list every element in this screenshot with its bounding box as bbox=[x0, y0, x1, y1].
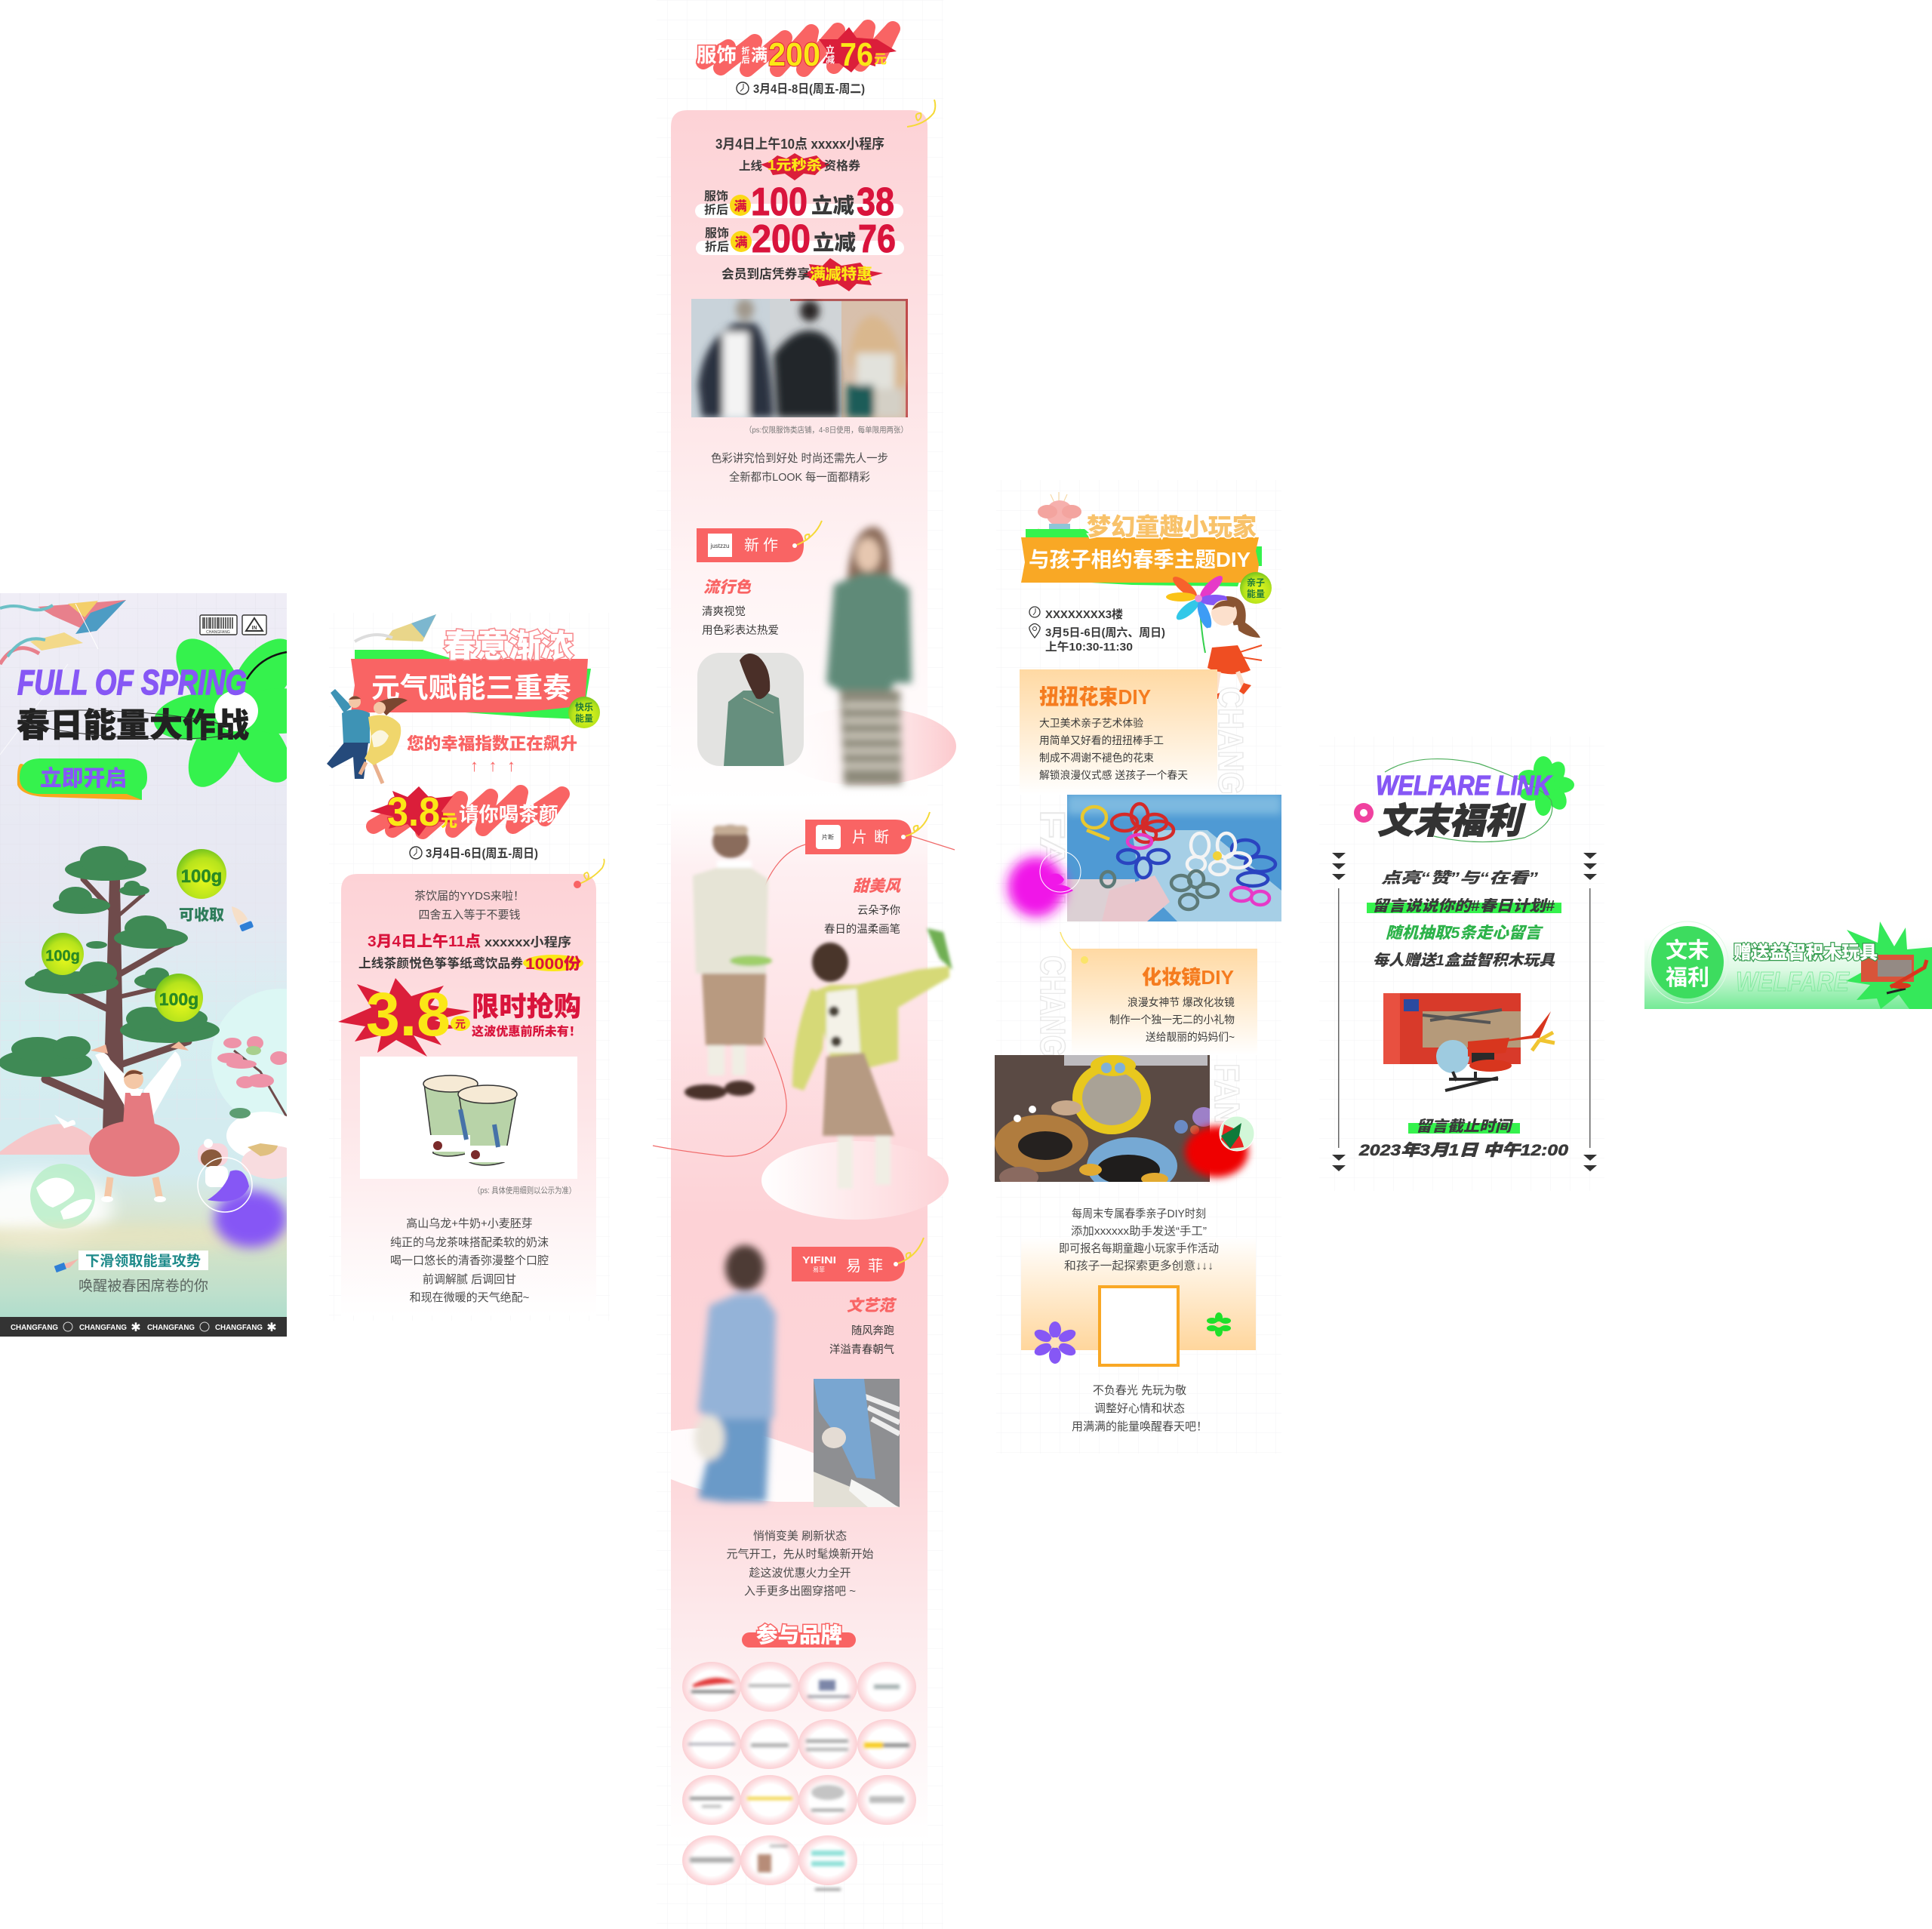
heading: fashion discount: 折 bbox=[741, 45, 750, 56]
background grid: DIY column bbox=[996, 480, 1281, 1454]
burst bbox=[1846, 921, 1932, 1009]
intro text: 茶饮届的YYDS来啦！ bbox=[414, 890, 525, 903]
offer row 100: 100 bbox=[751, 180, 808, 224]
watermarks: FAN bbox=[1033, 810, 1072, 906]
recycle badge: IN bbox=[252, 626, 257, 631]
rule line 4: 每人赠送1盒益智积木玩具 bbox=[1373, 952, 1555, 969]
illustration: girl bbox=[1205, 596, 1262, 699]
slogan: 您的幸福指数正在飙升 bbox=[407, 734, 577, 753]
date: 3月4日-8日(周五-周二) bbox=[753, 83, 865, 96]
panel: fashion bbox=[653, 27, 956, 1891]
description: 洋溢青春朝气 bbox=[829, 1343, 894, 1356]
banner: 与孩子相约春季主题DIY bbox=[1029, 548, 1251, 571]
label: collectable: 可收取 bbox=[179, 906, 224, 924]
bubble: 100g bbox=[177, 849, 226, 899]
brand logos grid bbox=[682, 1662, 916, 1891]
blurred purple blob bbox=[214, 1190, 287, 1248]
paragraph: 喝一口悠长的清香弥漫整个口腔 bbox=[390, 1254, 549, 1267]
footer bar: CHANGFANG bbox=[215, 1323, 263, 1332]
bubble: 100g middle: 100g bbox=[159, 989, 198, 1009]
panel: welfare banner bbox=[1644, 921, 1932, 1009]
banner: 元气赋能三重奏 bbox=[371, 672, 571, 703]
offer row 200: 满 bbox=[735, 235, 747, 250]
tag: brand 新作 bbox=[697, 521, 822, 562]
heading: 3.8 tea bbox=[370, 786, 562, 836]
heading: popular color: 流行色 bbox=[703, 578, 752, 596]
paragraph: 和现在微暖的天气绝配~ bbox=[410, 1291, 530, 1304]
tag: brand 新作: 新 作 bbox=[744, 537, 778, 554]
price burst bbox=[338, 978, 471, 1057]
footnote: （ps: 具体使用细则以公示为准） bbox=[473, 1185, 576, 1195]
icon: pointing hand bbox=[232, 906, 254, 932]
photo: twist-stick bouquet bbox=[1067, 795, 1281, 921]
offer row 100: 服饰 bbox=[704, 189, 728, 203]
icon: kite bbox=[0, 600, 126, 755]
button: start: 立即开启 bbox=[40, 765, 127, 791]
outline text WELFARE: WELFARE bbox=[1736, 966, 1850, 997]
description: 大卫美术亲子艺术体验 bbox=[1039, 717, 1143, 729]
description bbox=[1109, 996, 1235, 1043]
rule line 1: 点亮“赞”与“在看” bbox=[1381, 869, 1538, 887]
panel: spring poster bbox=[0, 593, 287, 1337]
description: 用色彩表达热爱 bbox=[702, 624, 779, 637]
description: 解锁浪漫仪式感 送孩子一个春天 bbox=[1039, 769, 1188, 781]
english title: FULL OF SPRING bbox=[17, 663, 247, 702]
image: toy helicopter bbox=[1383, 993, 1555, 1091]
paragraph: 纯正的乌龙茶味搭配柔软的奶沫 bbox=[390, 1236, 549, 1249]
offer row 100 bbox=[695, 180, 903, 224]
circle badge: 福利 bbox=[1666, 965, 1709, 990]
photo: jeans and shoes bbox=[814, 1379, 900, 1507]
intro text 2: 四舍五入等于不要钱 bbox=[418, 908, 521, 921]
footnote: （ps:仅限服饰类店铺，4-8日使用，每单限用两张） bbox=[745, 425, 908, 435]
card: mirror bbox=[1072, 949, 1257, 1055]
watermarks: CHANG bbox=[1211, 687, 1251, 795]
card: twist flowers bbox=[1020, 669, 1217, 795]
photo: fashion models (blurred) bbox=[691, 299, 908, 417]
watermarks bbox=[1033, 687, 1251, 1124]
icon: green flower bbox=[1518, 756, 1574, 816]
flash sale heading: 限时抢购 bbox=[472, 991, 581, 1022]
background grid: tea column bbox=[329, 613, 610, 1321]
price burst: 元 bbox=[455, 1018, 466, 1030]
coupon line: 资格券 bbox=[824, 158, 860, 173]
watermarks: FAN bbox=[1208, 1063, 1247, 1124]
footer bar: CHANGFANG bbox=[11, 1323, 58, 1332]
closing text: 调整好心情和状态 bbox=[1094, 1402, 1185, 1415]
offer card bbox=[338, 859, 605, 1315]
tag: brand 新作: justzzu bbox=[710, 543, 729, 549]
illustration: pine tree bbox=[0, 846, 220, 1132]
icon: pinwheel bbox=[1166, 573, 1230, 653]
card: sign-up bbox=[1021, 1208, 1256, 1365]
description: 送给靓丽的妈妈们~ bbox=[1146, 1031, 1235, 1043]
offer row 200: 服饰 bbox=[705, 226, 729, 240]
heading: fashion discount: 76 bbox=[840, 36, 873, 73]
deadline date: 2023年3月1日 中午12:00 bbox=[1358, 1141, 1568, 1159]
description: 用简单又好看的扭扭棒手工 bbox=[1039, 734, 1164, 746]
red blurred blob bbox=[1185, 1116, 1254, 1177]
barcode tag: CHANGFANG bbox=[206, 630, 230, 635]
badge: happy energy bbox=[568, 697, 600, 728]
badge: happy energy: 快乐 bbox=[575, 701, 593, 712]
description bbox=[829, 1324, 894, 1356]
closing paragraph bbox=[726, 1530, 874, 1598]
closing text: 不负春光 先玩为敬 bbox=[1093, 1384, 1186, 1397]
icon: crown mascot bbox=[1038, 492, 1081, 537]
time line: 3月4日上午11点 bbox=[368, 932, 481, 950]
decorative orbit bbox=[20, 652, 287, 744]
panel: tea offer bbox=[327, 614, 605, 1315]
closing text: 用满满的能量唤醒春天吧！ bbox=[1072, 1420, 1208, 1433]
circle badge: 文末 bbox=[1666, 938, 1709, 963]
heading: 3.8 tea: 元 bbox=[441, 811, 457, 830]
description bbox=[824, 904, 900, 936]
rule line 2: 留言说说你的#春日计划# bbox=[1372, 897, 1555, 915]
heading: 扭扭花束DIY bbox=[1039, 685, 1151, 709]
heading outline: 梦幻童趣小玩家 bbox=[1087, 513, 1257, 540]
title: 文末福利 bbox=[1377, 801, 1526, 841]
photo: blue denim model (blurred) bbox=[694, 1245, 776, 1502]
offer row 200: 76 bbox=[858, 217, 896, 261]
sign-up text bbox=[1059, 1208, 1219, 1272]
offer row 200: 立减 bbox=[813, 230, 856, 254]
coupon line: 上线 bbox=[739, 158, 762, 173]
image: toy bbox=[1861, 955, 1927, 993]
heading: 3.8 tea: 3.8 bbox=[387, 789, 440, 835]
headline: 赠送益智积木玩具 bbox=[1734, 942, 1878, 963]
recycle badge bbox=[242, 615, 266, 635]
offer row 100: 38 bbox=[857, 180, 894, 224]
bubble: 100g: 100g bbox=[181, 866, 222, 887]
photo: green jacket model (blurred) bbox=[826, 527, 912, 785]
english title: WELFARE LINK bbox=[1376, 770, 1553, 801]
arrows up: ↑↑↑ bbox=[470, 756, 515, 775]
ellipse: floor for yellow look bbox=[761, 1141, 949, 1220]
sign-up text: 每周末专属春季亲子DIY时刻 bbox=[1072, 1208, 1206, 1220]
product image bbox=[360, 1057, 577, 1179]
photo: yellow jacket model bbox=[792, 928, 952, 1189]
photo: back view jacket bbox=[697, 653, 804, 766]
footer bar: ✱ bbox=[266, 1321, 277, 1334]
bubble: 100g left bbox=[42, 933, 84, 975]
closing paragraph: 入手更多出圈穿搭吧 ~ bbox=[744, 1585, 856, 1598]
circle badge bbox=[1647, 921, 1728, 1003]
time: 上午10:30-11:30 bbox=[1045, 640, 1133, 654]
heading: fashion discount: 后 bbox=[741, 54, 750, 65]
footer bar: ✱ bbox=[131, 1321, 141, 1334]
background grid: clothing column bbox=[657, 0, 943, 1929]
side rules bbox=[1332, 853, 1597, 1171]
paragraph: 前调解腻 后调回甘 bbox=[423, 1273, 516, 1286]
footer bar bbox=[0, 1317, 287, 1337]
icon: tag string bbox=[1060, 932, 1085, 960]
tag: brand 易菲 bbox=[792, 1238, 924, 1281]
tag: brand 易菲: 易菲 bbox=[813, 1266, 825, 1273]
closing paragraph: 悄悄变美 刷新状态 bbox=[753, 1530, 847, 1543]
bubble: 100g left: 100g bbox=[45, 948, 80, 964]
illustration: dancing couple bbox=[327, 689, 408, 783]
heading: fashion discount bbox=[697, 27, 897, 73]
icon: tag string bbox=[907, 100, 935, 127]
heading: 3.8 tea: 请你喝茶颜 bbox=[459, 803, 558, 826]
illustration: branch blossoms bbox=[217, 1036, 288, 1117]
photo: clay mirrors bbox=[995, 1055, 1210, 1182]
intro text 2: 全新都市LOOK 每一面都精彩 bbox=[729, 470, 870, 484]
date: 3月5日-6日(周六、周日) bbox=[1045, 626, 1165, 639]
closing paragraph: 趁这波优惠火力全开 bbox=[749, 1566, 851, 1580]
barcode tag bbox=[200, 615, 237, 635]
icon: tea cups bbox=[423, 1075, 517, 1165]
sign-up text: 即可报名每期童趣小玩家手作活动 bbox=[1059, 1241, 1219, 1255]
offer line: 上线茶颜悦色筝筝纸鸢饮品券 bbox=[358, 955, 524, 971]
heading: literary style: 文艺范 bbox=[847, 1297, 897, 1315]
icon: pink flower bbox=[1354, 803, 1374, 823]
white wave bbox=[671, 1428, 823, 1502]
bubble: 100g middle bbox=[155, 974, 203, 1022]
badge: family energy: 亲子 bbox=[1247, 577, 1265, 588]
icon: small kite bbox=[355, 614, 436, 641]
tag: brand 片断: 片断 bbox=[822, 833, 834, 841]
title: 春日能量大作战 bbox=[17, 707, 249, 744]
offer row 200 bbox=[696, 217, 904, 261]
heading: sweet style: 甜美风 bbox=[853, 877, 902, 895]
card background bbox=[671, 110, 928, 1841]
offer row 100: 满 bbox=[734, 198, 747, 214]
paragraph: 高山乌龙+牛奶+小麦胚芽 bbox=[406, 1217, 533, 1230]
offer row 200: 200 bbox=[752, 217, 811, 261]
description: 随风奔跑 bbox=[851, 1324, 894, 1337]
panel: welfare bbox=[1332, 756, 1597, 1171]
sign-up text: 和孩子一起探索更多创意↓↓↓ bbox=[1064, 1259, 1214, 1272]
offer line bbox=[358, 955, 583, 973]
location: XXXXXXXX3楼 bbox=[1045, 608, 1123, 621]
heading: fashion discount: 减 bbox=[826, 54, 835, 65]
mint hill bbox=[211, 989, 287, 1115]
footer bar: CHANGFANG bbox=[79, 1323, 127, 1332]
magenta blurred blob bbox=[1008, 851, 1081, 917]
description: 浪漫女神节 爆改化妆镜 bbox=[1128, 996, 1235, 1008]
footer bar: CHANGFANG bbox=[147, 1323, 195, 1332]
description: 制作一个独一无二的小礼物 bbox=[1109, 1014, 1235, 1026]
member offer: 会员到店凭券享 bbox=[721, 266, 810, 282]
offer row 100: 折后 bbox=[704, 203, 728, 217]
callout: scroll down: 下滑领取能量攻势 bbox=[85, 1253, 201, 1269]
ellipse: floor for green look bbox=[775, 707, 956, 786]
badge: family energy: 能量 bbox=[1247, 588, 1265, 599]
heading: fashion discount: 200 bbox=[768, 36, 820, 73]
price burst: 3.8 bbox=[366, 980, 451, 1049]
time line bbox=[368, 932, 571, 950]
callout: scroll down bbox=[54, 1251, 208, 1272]
offer row 100: 立减 bbox=[811, 193, 854, 217]
QR frame bbox=[1100, 1287, 1178, 1365]
heading: 化妆镜DIY bbox=[1142, 966, 1234, 989]
heading outline: 春意渐浓 bbox=[444, 628, 574, 663]
badge: happy energy: 能量 bbox=[575, 712, 593, 724]
rule line 3: 随机抽取5条走心留言 bbox=[1386, 924, 1544, 942]
line: red connector bbox=[653, 836, 955, 1156]
offer line: 1000份 bbox=[525, 955, 581, 973]
heading: participating brands: 参与品牌 bbox=[756, 1623, 842, 1647]
subtitle: 唤醒被春困席卷的你 bbox=[78, 1278, 208, 1294]
description: 制成不凋谢不褪色的花束 bbox=[1039, 752, 1154, 764]
coupon line: 1元秒杀 bbox=[768, 157, 822, 173]
time line: 3月4日上午10点 xxxxx小程序 bbox=[715, 136, 884, 152]
offer row 200: 折后 bbox=[705, 240, 729, 254]
intro text: 色彩讲究恰到好处 时尚还需先人一步 bbox=[711, 452, 888, 465]
illustration: right dog and plants bbox=[198, 1108, 302, 1248]
photo: cream jacket model (blurred) bbox=[685, 825, 772, 1100]
description: 春日的温柔画笔 bbox=[824, 923, 900, 936]
heading: fashion discount: 满 bbox=[751, 46, 768, 65]
sale sub heading: 这波优惠前所未有！ bbox=[472, 1024, 581, 1038]
coupon line bbox=[739, 153, 860, 180]
heading: participating brands bbox=[742, 1623, 856, 1647]
banner bbox=[1021, 529, 1262, 586]
deadline label: 留言截止时间 bbox=[1416, 1118, 1514, 1135]
icon: green flower small bbox=[1207, 1312, 1231, 1337]
illustration: jumping girl bbox=[89, 1041, 189, 1202]
illustration: left hills and cloud bbox=[0, 1115, 223, 1253]
heading: fashion discount: 元 bbox=[874, 52, 887, 66]
paragraph bbox=[390, 1217, 549, 1304]
member offer bbox=[721, 258, 883, 291]
badge: family energy bbox=[1240, 572, 1272, 604]
curve bbox=[1385, 759, 1552, 842]
time line: xxxxxx小程序 bbox=[485, 934, 571, 949]
watermarks: CHANG bbox=[1033, 955, 1072, 1057]
description bbox=[702, 605, 779, 637]
tag: brand 易菲: 易 菲 bbox=[846, 1257, 883, 1275]
closing paragraph: 元气开工，先从时髦焕新开始 bbox=[726, 1547, 874, 1561]
tag: brand 易菲: YIFINI bbox=[802, 1254, 836, 1266]
tag: brand 片断: 片 断 bbox=[852, 829, 889, 846]
heading: fashion discount: 服饰 bbox=[697, 44, 737, 66]
panel: kids DIY bbox=[995, 492, 1281, 1433]
description: 云朵予你 bbox=[857, 904, 900, 917]
banner bbox=[351, 650, 591, 719]
tag: brand 片断 bbox=[805, 812, 930, 854]
icon: tag string bbox=[574, 859, 605, 888]
closing text bbox=[1072, 1384, 1208, 1433]
heading: fashion discount: 立 bbox=[826, 44, 835, 55]
icon: purple flower bbox=[1032, 1321, 1078, 1364]
description bbox=[1039, 717, 1188, 781]
button: start bbox=[17, 758, 147, 800]
background grid: welfare column bbox=[1319, 737, 1604, 1191]
description: 清爽视觉 bbox=[702, 605, 746, 618]
icon: green flower bbox=[154, 638, 287, 787]
sign-up text: 添加xxxxxx助手发送“手工” bbox=[1071, 1225, 1207, 1238]
member offer: 满减特惠 bbox=[810, 266, 872, 283]
date: 3月4日-6日(周五-周日) bbox=[426, 848, 538, 860]
